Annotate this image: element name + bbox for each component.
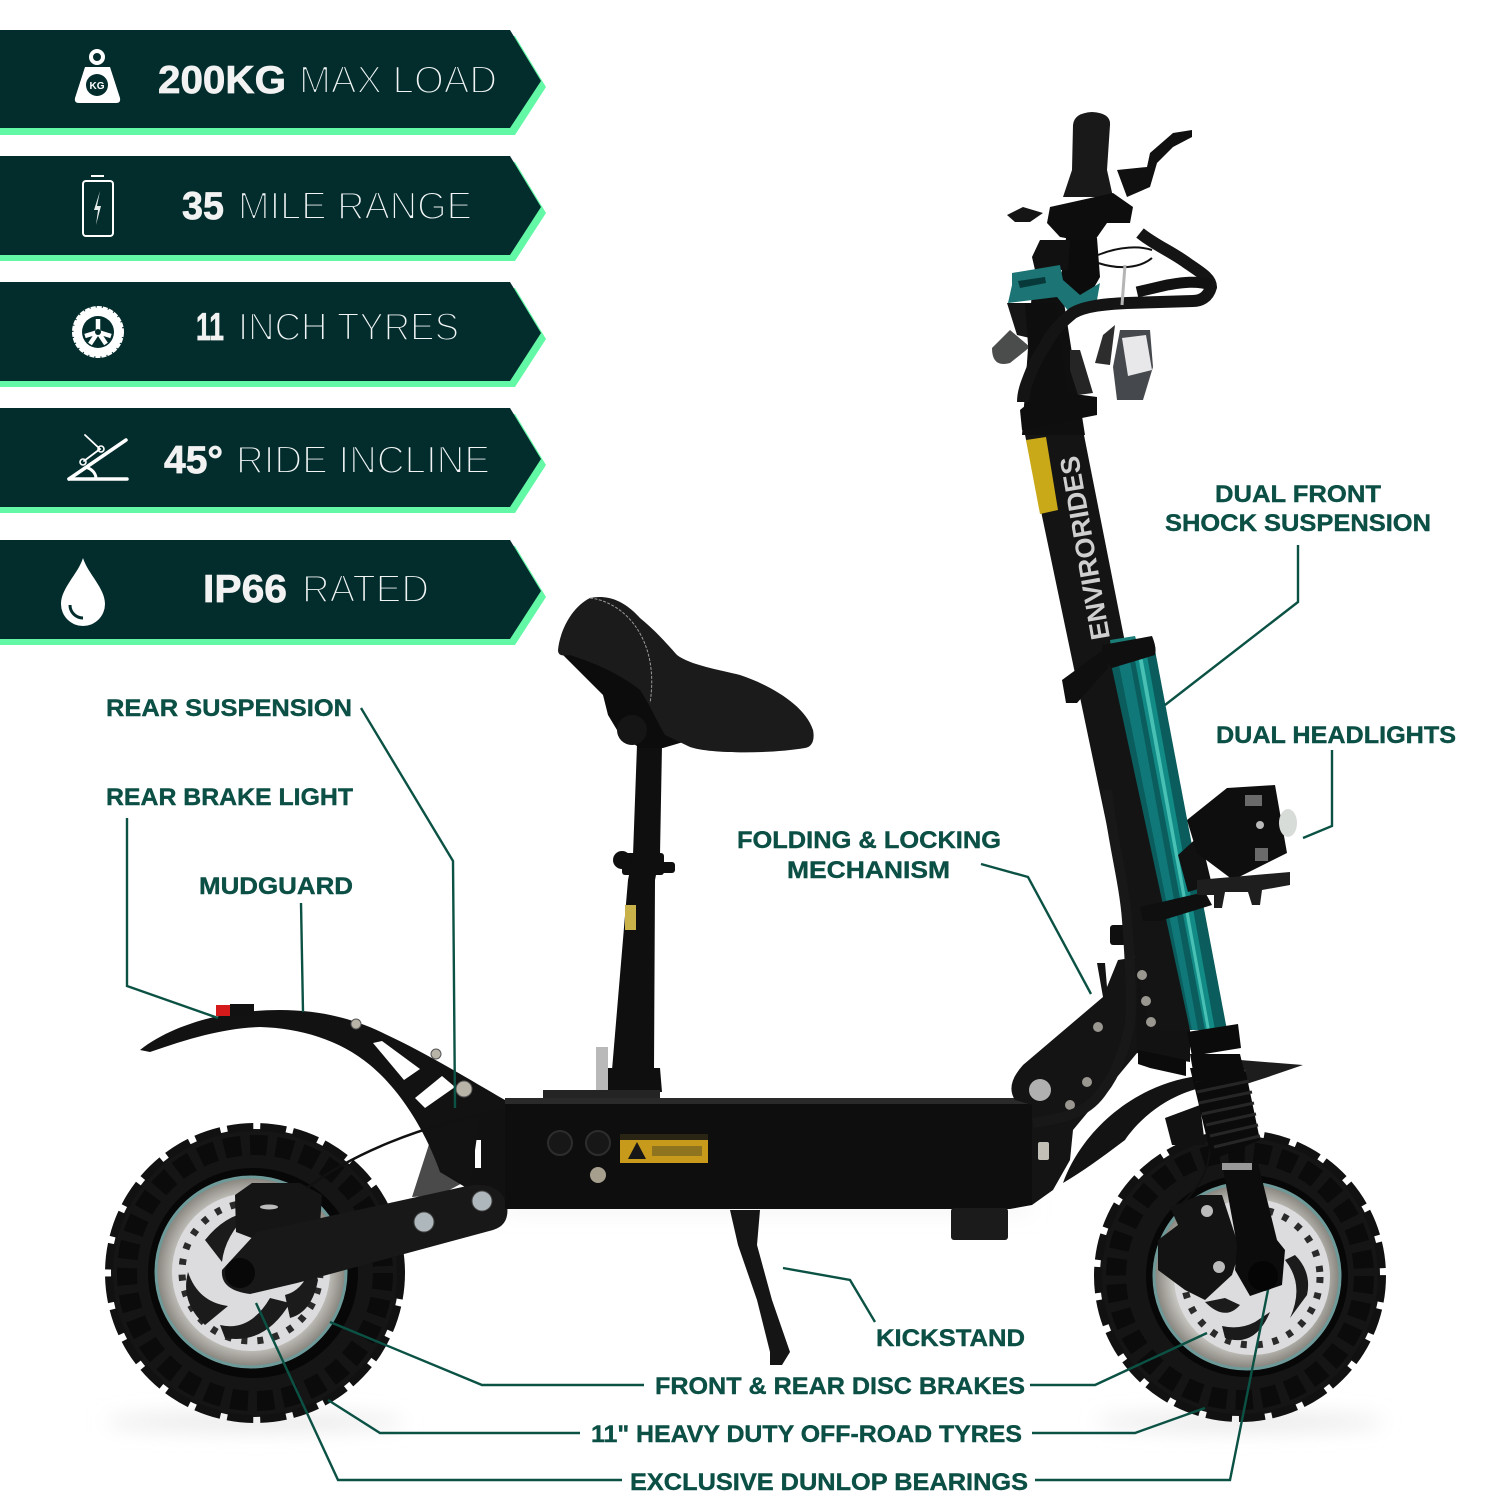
front brake cable [1180,1108,1210,1205]
label: dual headlights [1216,722,1456,838]
label: folding and locking mechanism: MECHANISM [787,857,950,884]
banner text: IP66 rated: RATED [302,568,429,611]
banner: 11 inch tyres [0,282,546,387]
label: exclusive dunlop bearings: EXCLUSIVE DUNLOP BEARINGS [630,1469,1028,1496]
neck [1060,238,1100,300]
deck foot [951,1208,1008,1240]
headlight [1178,785,1297,908]
front suspension bellows [1190,1068,1260,1170]
label: rear brake light [106,784,353,1018]
label: dual headlights: DUAL HEADLIGHTS [1216,722,1456,749]
banner text: 200kg max load: MAX LOAD [299,59,497,102]
front caliper [1158,1195,1240,1300]
label: exclusive dunlop bearings [256,1290,1268,1496]
banner text: IP66 rated: IP66 [203,568,287,611]
banner text: 11 inch tyres: INCH TYRES [238,306,459,349]
ground shadow [105,1205,1385,1430]
left lever [1007,207,1043,222]
top grip [1063,112,1113,197]
label: dual front shock suspension [1165,481,1431,705]
icon: weight: KG [90,81,105,92]
kickstand [730,1210,790,1365]
banner text: 45 degree ride incline: RIDE INCLINE [236,439,490,482]
front fork [1222,1163,1285,1296]
teal clamp [1008,265,1100,313]
scooter [109,112,1382,1419]
banner: 45 degree ride incline [0,408,546,513]
icon: weight [75,51,120,103]
label: kickstand: KICKSTAND [876,1325,1025,1352]
front mudguard [1063,1076,1200,1183]
icon: tyre [74,308,122,356]
brake cable clip [1070,350,1093,395]
label: dual front shock suspension: DUAL FRONT [1215,481,1381,508]
banner text: 45 degree ride incline: 45° [164,439,223,482]
brand name on stem: ENVIRORIDES [1054,454,1116,642]
rear wheel [109,1127,401,1419]
lower stem [1020,303,1097,430]
banner: 35 mile range [0,156,546,261]
label: rear brake light: REAR BRAKE LIGHT [106,784,353,811]
housing [1047,193,1133,243]
brake lever [1117,130,1192,197]
main stem [1024,430,1190,1030]
coiled cable [1033,790,1131,1123]
label: heavy duty off-road tyres: 11" HEAVY DUTY OFF-ROAD TYRES [591,1421,1022,1448]
seat post sticker [625,905,636,930]
banner: IP66 rated [0,540,546,645]
display [1032,240,1070,270]
label: front and rear disc brakes [330,1322,1207,1400]
lower fork clamp [1138,1024,1245,1082]
spiral handlebar cable [1023,233,1211,402]
swingarm [222,1185,507,1294]
keys [1095,265,1153,400]
label: front and rear disc brakes: FRONT & REAR DISC BRAKES [655,1373,1025,1400]
safety sticker [1026,437,1058,514]
front wheel [1098,1134,1382,1418]
front suspension spring behind boot [1165,1105,1205,1145]
handlebar assembly [992,112,1211,430]
banner text: 35 mile range: MILE RANGE [238,185,472,228]
warning label [620,1134,708,1163]
icon: incline [69,435,127,479]
lower grip [992,330,1030,364]
banner text: 200kg max load: 200KG [158,59,286,102]
seat [558,597,814,752]
label: dual front shock suspension: SHOCK SUSPENSION [1165,510,1431,537]
steering plate behind stem [1137,957,1190,1062]
icon: water drop [61,558,105,626]
banner text: 11 inch tyres: 11 [196,306,224,349]
banner: 200kg max load [0,30,546,135]
label: mudguard: MUDGUARD [199,873,353,900]
banner text: 35 mile range: 35 [182,185,224,228]
mudguard frame cutouts [373,1041,455,1108]
label: rear suspension [106,695,455,1108]
rear brake light [216,1005,230,1016]
folding mechanism [1011,957,1156,1205]
rear bracket and shock [412,1100,505,1205]
rear brake caliper [235,1183,322,1245]
label: folding and locking mechanism: FOLDING & LOCKING [737,827,1001,854]
bolts [351,1019,472,1097]
seat post [543,745,675,1098]
deck [505,1098,1032,1209]
label: kickstand [783,1268,1025,1352]
swingarm bolts [414,1191,492,1232]
rear mudguard [140,1010,505,1186]
seat hook [596,1047,608,1090]
icon: battery [83,175,113,236]
stem clamps [1062,636,1212,945]
shock tube [1108,636,1227,1030]
rear brake cable [307,1110,503,1188]
label: folding and locking mechanism [737,827,1091,994]
label: rear suspension: REAR SUSPENSION [106,695,352,722]
deck ports [548,1131,610,1155]
label: heavy duty off-road tyres [328,1400,1205,1448]
